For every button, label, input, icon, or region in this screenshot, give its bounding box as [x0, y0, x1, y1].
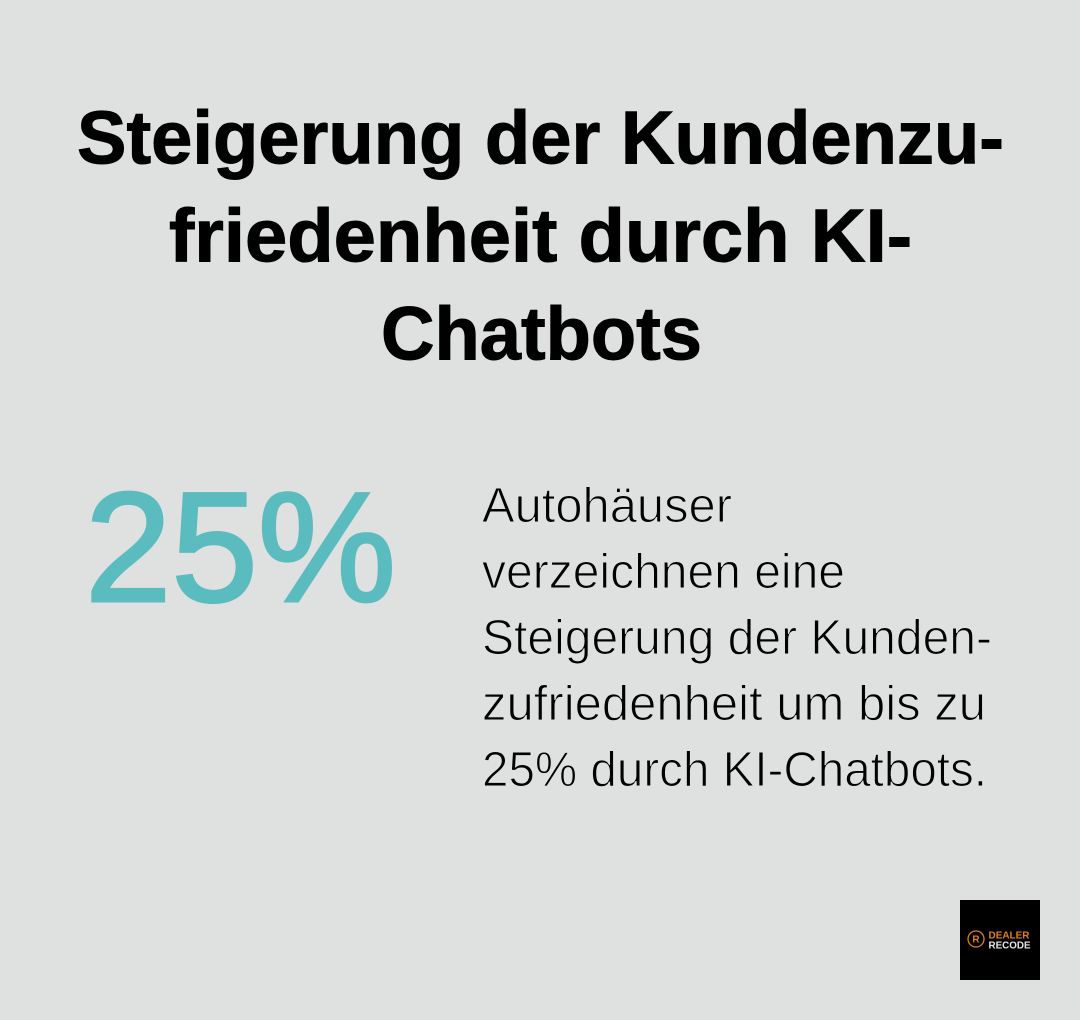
title: Chatbots: [381, 292, 702, 376]
icon: logo ring with R: R: [972, 934, 980, 946]
title: Steigerung der Kundenzu-: [77, 96, 1004, 180]
description text: Steigerung der Kunden-: [482, 611, 992, 665]
title: [77, 96, 1004, 376]
logo wordmark: [988, 930, 1031, 952]
description text: 25% durch KI-Chatbots.: [482, 743, 987, 797]
logo wordmark: DEALER: [988, 930, 1030, 942]
logo wordmark: RECODE: [988, 940, 1031, 952]
description text: verzeichnen eine: [482, 545, 845, 599]
description text: zufriedenheit um bis zu: [482, 677, 986, 731]
description text: Autohäuser: [482, 479, 732, 533]
description text: [482, 479, 992, 797]
big statistic: 25%: 25%: [85, 461, 396, 635]
logo: Dealer Recode: [960, 900, 1040, 980]
title: friedenheit durch KI-: [169, 194, 912, 278]
